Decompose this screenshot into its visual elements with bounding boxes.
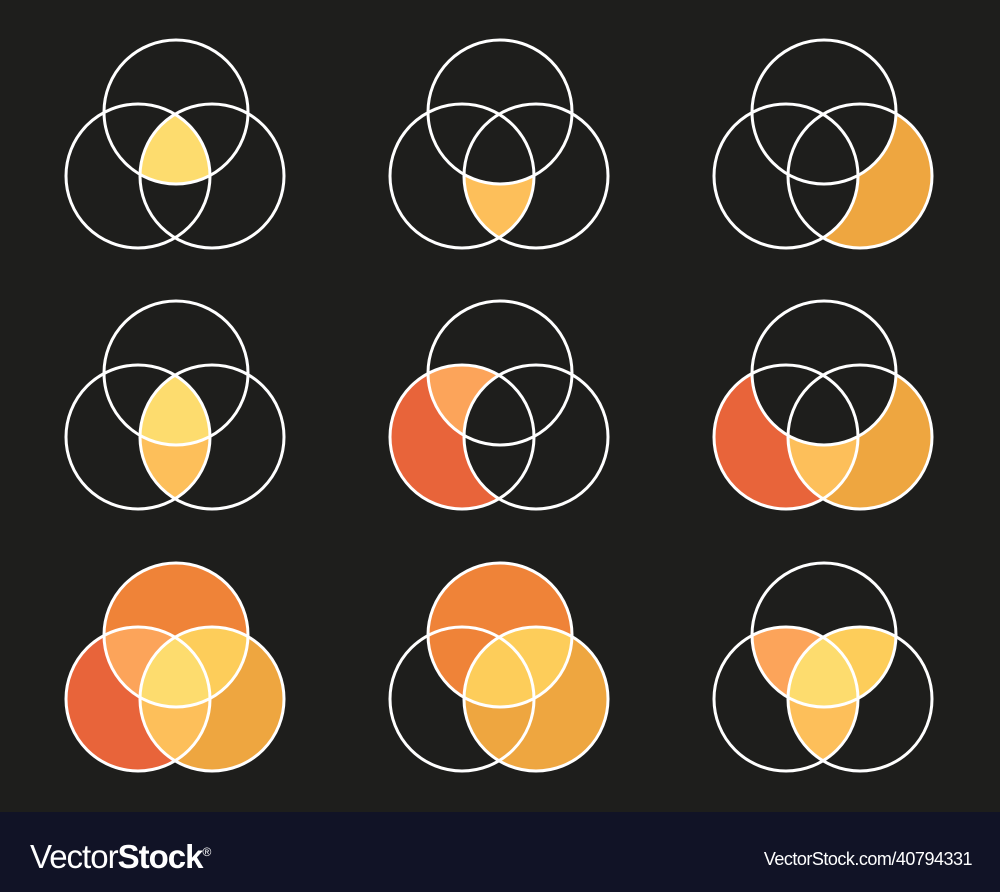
venn 7: all [66, 563, 284, 771]
venn 3: right only [714, 40, 932, 248]
footer bar [0, 812, 1000, 892]
venn 5: left minus right [390, 301, 608, 509]
logo text: VectorStock® [30, 838, 210, 875]
venn 6: left and right minus top [714, 301, 932, 509]
venn 8: top and right [390, 563, 608, 771]
venn 2: L∩R minus T [390, 40, 608, 248]
image id text: VectorStock.com/40794331 [764, 849, 972, 869]
venn diagrams grid [64, 38, 934, 772]
venn 1: center [66, 40, 284, 248]
venn 9: intersections [714, 563, 932, 771]
venn 4: L∩R [66, 301, 284, 509]
